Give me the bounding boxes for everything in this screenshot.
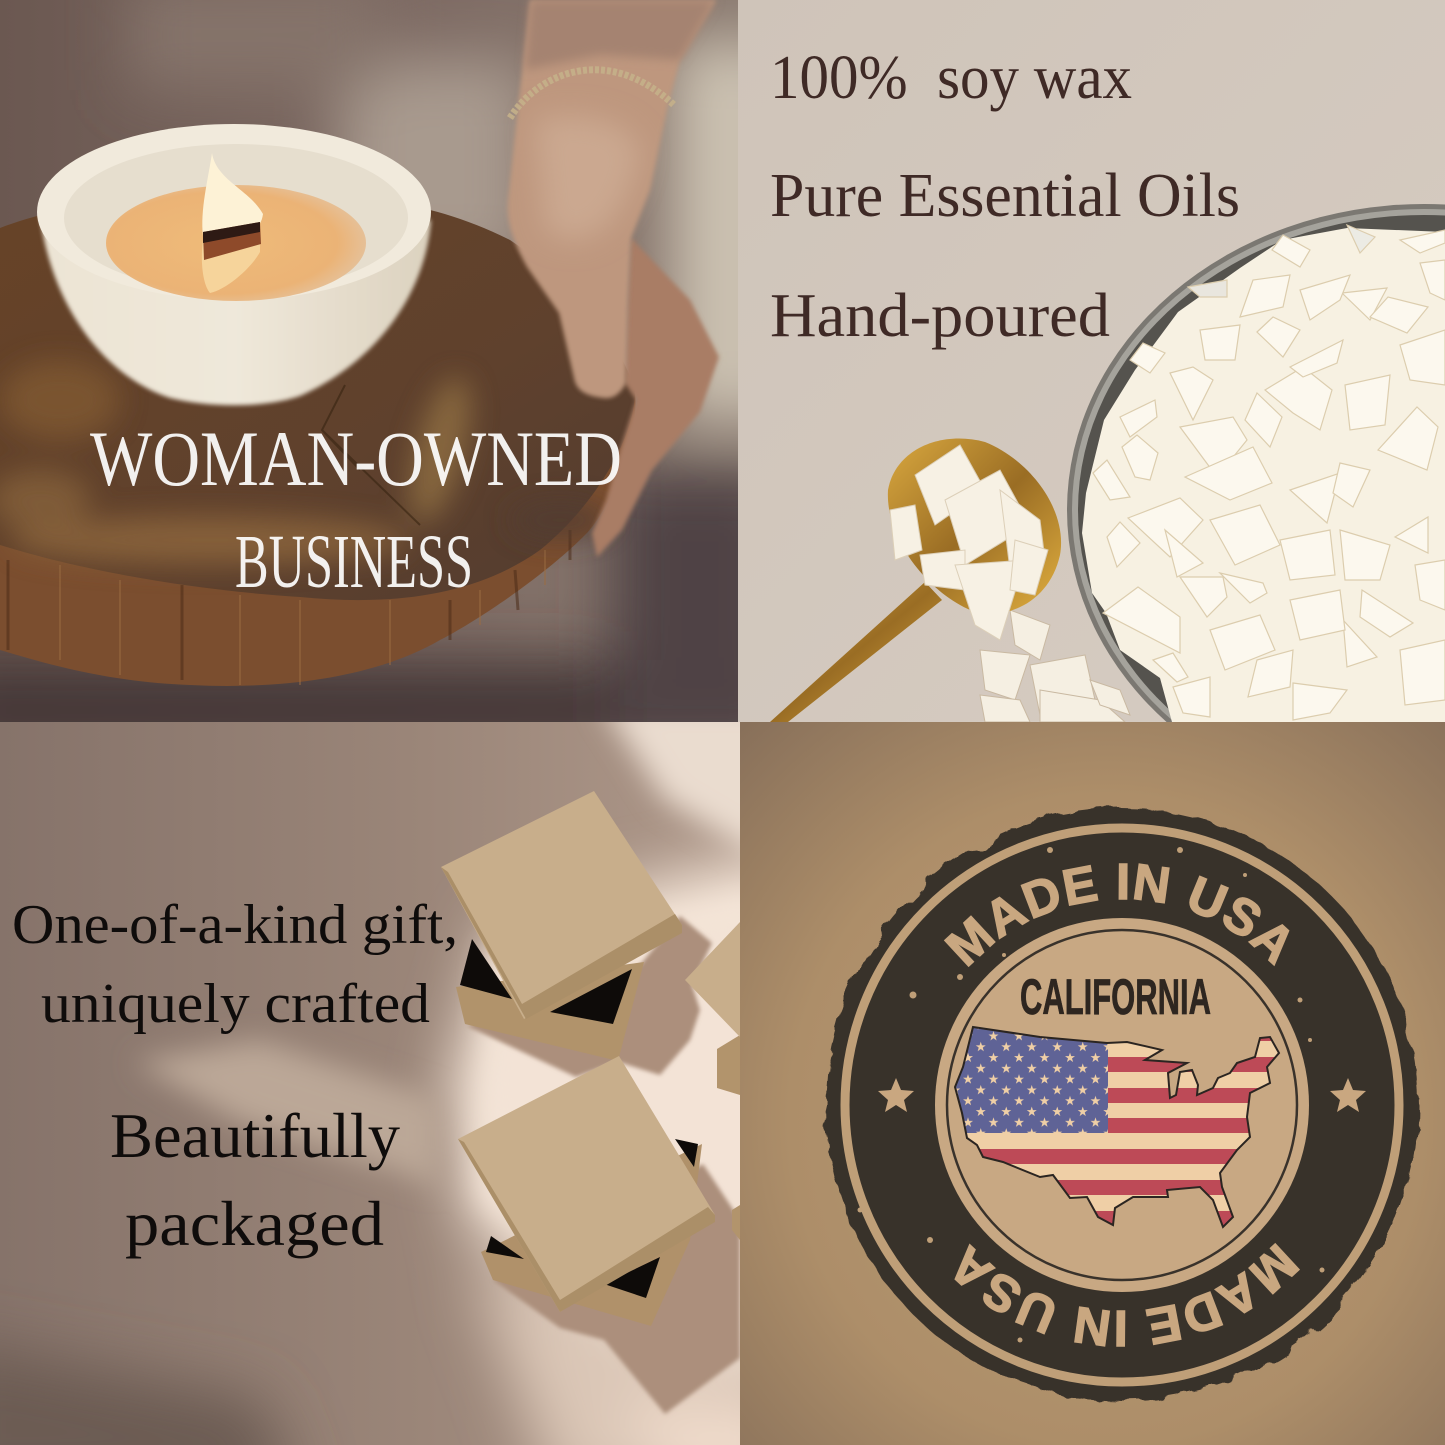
box 1 <box>441 791 682 1061</box>
candle bowl <box>37 124 431 405</box>
light and shadow bands <box>0 850 800 1445</box>
bracelet <box>510 70 674 118</box>
hand and arm <box>508 0 719 557</box>
wood slab side <box>0 390 636 686</box>
flame <box>202 153 263 236</box>
icon: right star <box>1330 1078 1366 1112</box>
text: packaged: packaged <box>125 1188 384 1259</box>
panel: woman-owned business candle photo <box>0 0 738 722</box>
metal bowl <box>1067 204 1445 722</box>
stamp specks <box>858 847 1324 1342</box>
stamp <box>822 805 1421 1402</box>
flakes on spoon <box>890 445 1048 640</box>
wooden wick <box>203 222 261 260</box>
panel: made in USA stamp on cardboard <box>740 722 1445 1445</box>
text: pure essential oils: Pure Essential Oils <box>770 162 1240 230</box>
text: uniquely crafted: uniquely crafted <box>41 973 430 1035</box>
blurred clothing background <box>0 0 738 722</box>
text: hand-poured: Hand-poured <box>770 282 1110 350</box>
text: california: CALIFORNIA <box>1020 969 1211 1025</box>
text: one-of-a-kind gift: One-of-a-kind gift, <box>12 894 458 956</box>
text: beautifully: Beautifully <box>110 1100 400 1171</box>
box 3 <box>685 922 740 1240</box>
panel: gift boxes photo <box>0 722 740 1445</box>
panel: soy wax flakes photo <box>738 0 1445 722</box>
box shadows <box>467 916 740 1414</box>
wood grain highlights <box>0 360 610 564</box>
USA flag map <box>950 1020 1298 1235</box>
title: business: BUSINESS <box>235 520 473 604</box>
stamp text: made in USA top: MADE IN USA <box>944 863 1290 968</box>
box 2 <box>458 1056 715 1326</box>
text: 100% soy wax: 100% soy wax <box>770 44 1132 112</box>
loose flakes pile <box>980 610 1130 722</box>
wax flakes in bowl <box>1082 225 1445 722</box>
stamp text: made in USA bottom: MADE IN USA <box>954 1242 1300 1347</box>
gold spoon <box>770 439 1061 722</box>
title: woman-owned: WOMAN-OWNED <box>90 415 622 502</box>
icon: left star <box>878 1078 914 1112</box>
wood slab top <box>0 194 635 600</box>
